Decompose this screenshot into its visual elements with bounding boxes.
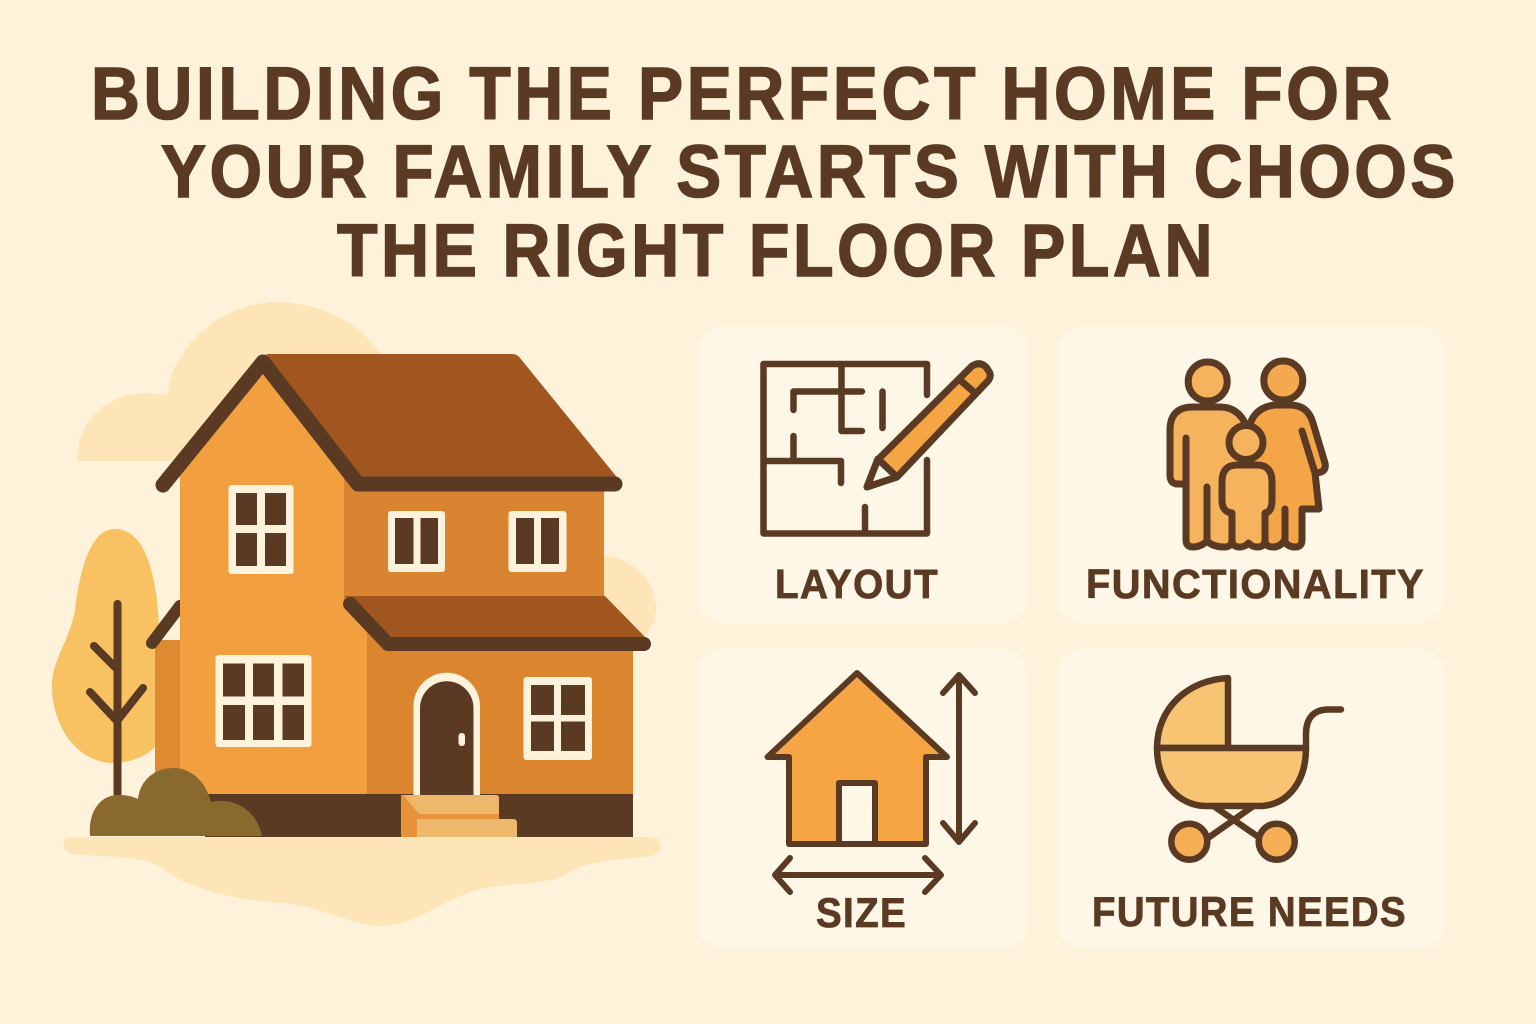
window: lower right xyxy=(524,677,592,760)
title: BUILDING THE PERFECT HOME FOR xyxy=(91,52,1395,135)
icon: baby stroller xyxy=(1157,678,1341,860)
label: future needs: FUTURE NEEDS xyxy=(1092,888,1407,935)
icon: floor plan with pencil xyxy=(764,364,990,534)
panel: functionality xyxy=(1058,328,1444,622)
lower right wall xyxy=(360,630,633,796)
background bush right xyxy=(600,556,656,640)
title: THE RIGHT FLOOR PLAN xyxy=(337,209,1216,292)
window: upper gable xyxy=(228,485,294,574)
icon: house with dimension arrows xyxy=(768,673,975,892)
left side wing xyxy=(152,606,181,795)
porch roof xyxy=(344,596,648,644)
label: layout: LAYOUT xyxy=(775,561,939,607)
panel: size xyxy=(698,650,1027,948)
window: upper right xyxy=(508,511,566,572)
label: functionality: FUNCTIONALITY xyxy=(1086,561,1425,607)
background cloud xyxy=(78,302,382,461)
ground xyxy=(63,837,661,926)
door xyxy=(414,673,480,796)
window: lower left xyxy=(216,655,312,747)
shrub xyxy=(90,768,262,836)
roof outline xyxy=(163,362,615,485)
icon: family xyxy=(1170,361,1325,547)
main roof xyxy=(266,354,620,481)
foundation xyxy=(205,794,633,837)
steps xyxy=(401,795,517,837)
upper right wall xyxy=(340,478,604,613)
title xyxy=(91,52,1459,292)
panel: future needs xyxy=(1058,650,1444,948)
label: size: SIZE xyxy=(816,889,907,936)
main gable wall xyxy=(180,366,367,796)
window: upper middle xyxy=(388,511,445,572)
panel: layout xyxy=(698,328,1027,622)
illustration: house scene xyxy=(52,302,661,926)
tree xyxy=(52,529,162,794)
